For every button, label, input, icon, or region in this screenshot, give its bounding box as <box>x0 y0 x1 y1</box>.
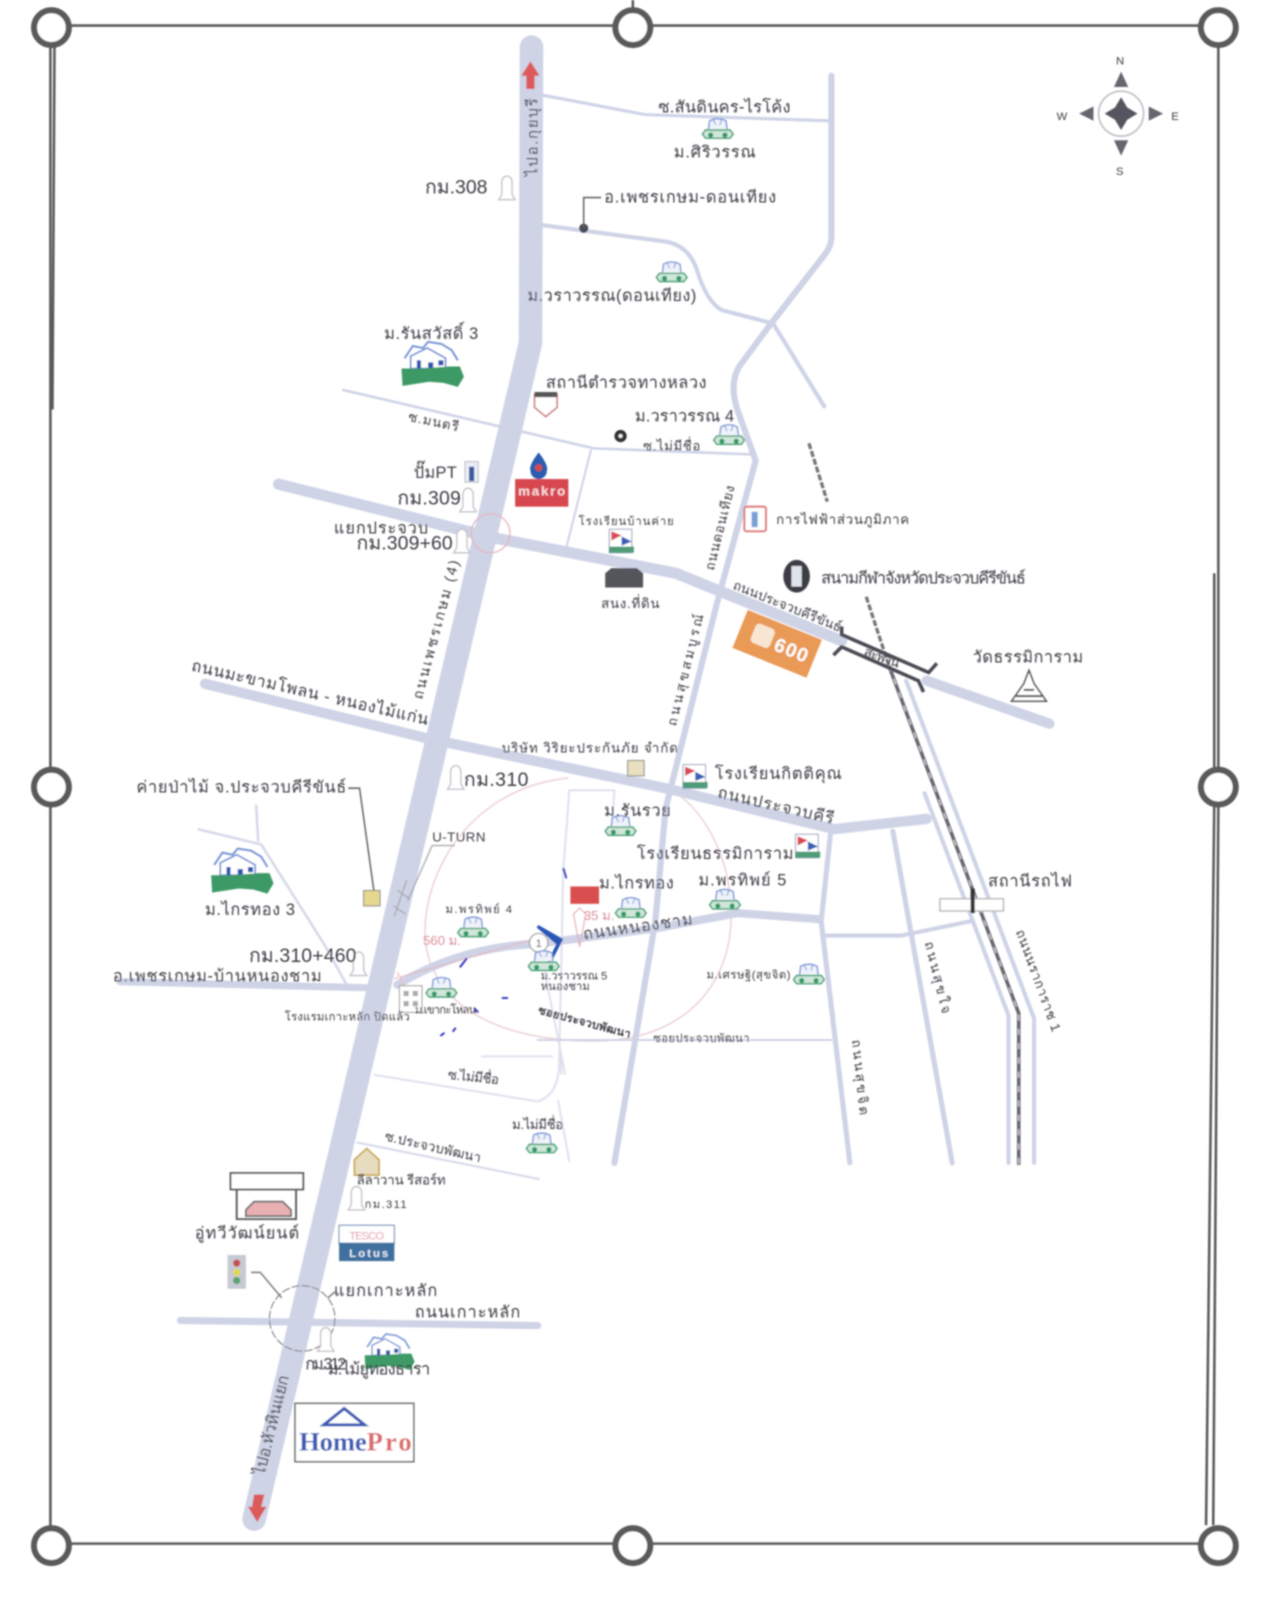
compass: W <box>1057 111 1068 123</box>
place labels: ถนนหนองชาม <box>582 910 694 944</box>
place labels: โรงเรียนบ้านค่าย <box>579 514 674 528</box>
Tesco Lotus logo <box>339 1225 394 1261</box>
place labels: กม.309 <box>397 488 461 510</box>
place labels: โรงแรมเกาะหลัก ปิดแล้ว <box>285 1010 410 1024</box>
place labels: ม.วราวรรณ 5 <box>541 971 607 983</box>
traffic light <box>227 1255 246 1289</box>
place labels: วัดธรรมิการาม <box>973 648 1083 666</box>
place labels: ถนนประจวบคีรีขันธ์ <box>731 577 844 635</box>
place labels: ไปอ.หัวหินแยก <box>249 1373 293 1479</box>
orange shop logo: 600 <box>771 634 811 667</box>
makro logo: makro <box>518 483 565 498</box>
place labels: บริษัท วิริยะประกันภัย จำกัด <box>502 740 678 755</box>
place labels: สนามกีฬาจังหวัดประจวบคีรีขันธ์ <box>821 568 1026 587</box>
road network <box>120 47 1049 1519</box>
place labels: ซ.ไม่มีชื่อ <box>643 436 700 453</box>
HomePro logo: Pro <box>367 1426 412 1456</box>
place labels: กม.311 <box>365 1199 407 1211</box>
red locator rectangle and distance marks: 1 <box>536 938 542 950</box>
place labels: อู่ทวีวัฒน์ยนต์ <box>195 1224 299 1244</box>
place labels: ถนนมะขามโพลน - หนองไม้แก่น <box>190 656 430 729</box>
compass: S <box>1116 166 1123 178</box>
place labels: ซอยประจวบพัฒนา <box>537 1004 632 1041</box>
place labels: ปั๊มPT <box>414 460 457 482</box>
place labels: กม.309+60 <box>356 533 453 555</box>
orange shop logo <box>732 610 822 678</box>
place labels: ลีลาวาน รีสอร์ท <box>357 1172 446 1187</box>
garage icon <box>231 1173 303 1219</box>
place labels: U-TURN <box>432 829 485 844</box>
kilometre markers <box>318 176 515 1351</box>
place labels: กม.310+460 <box>249 945 357 967</box>
place labels: ไปอ.กุยบุรี <box>524 98 543 178</box>
place labels: สถานีตำรวจทางหลวง <box>546 374 707 392</box>
red locator rectangle and distance marks <box>251 198 627 1351</box>
place labels: ม.พรทิพย์ 5 <box>698 870 786 889</box>
railway bridge <box>833 626 937 692</box>
place labels: อ.เพชรเกษม-บ้านหนองชาม <box>113 968 322 986</box>
place labels: โรงเรียนธรรมิการาม <box>637 844 794 863</box>
place labels: อ.เพชรเกษม-ดอนเทียง <box>604 189 776 207</box>
place labels: ม.รันรวย <box>604 802 671 820</box>
place labels: ม.รันสวัสดิ์ 3 <box>384 321 478 343</box>
direction arrows <box>248 61 540 1522</box>
place labels: สะพาน <box>862 644 902 671</box>
place labels: ม.ไม่มีชื่อ <box>512 1115 563 1132</box>
place labels: ซ.ประจวบพัฒนา <box>383 1129 483 1165</box>
place labels <box>113 98 1083 1479</box>
Tesco Lotus logo: Lotus <box>349 1248 388 1260</box>
place labels: กม.308 <box>425 176 487 198</box>
main highway <box>254 47 531 1519</box>
place labels: ถนนนราการาช 1 <box>1013 927 1064 1034</box>
Tesco Lotus logo: TESCO <box>349 1231 384 1243</box>
distance ring <box>425 778 731 1041</box>
place labels: ถนนประจวบคีรี <box>716 784 836 828</box>
railway <box>809 443 1019 1165</box>
makro logo <box>515 479 568 507</box>
place labels: การไฟฟ้าส่วนภูมิภาค <box>776 512 909 528</box>
place labels: ม.วราวรรณ(ดอนเทียง) <box>527 287 696 305</box>
place labels: ม.ไกรทอง 3 <box>205 900 295 919</box>
place labels: ม.ศิริวรรณ <box>674 144 756 162</box>
place labels: กม.310 <box>464 769 529 791</box>
place labels: แยกประจวบ <box>334 519 428 537</box>
place labels: ซอยประจวบพัฒนา <box>653 1033 750 1045</box>
place labels: ม.วราวรรณ 4 <box>635 408 734 426</box>
place labels: ถนนดอนเทียง <box>702 484 738 572</box>
place labels: ม.เศรษฐิ(สุขจิต) <box>707 970 791 982</box>
place labels: ถนนสุขใจ <box>921 940 954 1015</box>
place labels: ถนนสุขจิต <box>848 1039 872 1116</box>
HomePro logo: Home <box>299 1426 367 1456</box>
place labels: ม.เขากะโหลน <box>415 1002 477 1016</box>
place labels: สถานีรถไฟ <box>988 871 1072 890</box>
place labels: ม.พรทิพย์ 4 <box>446 903 512 916</box>
place labels: ม.ไม้ยูทองธารา <box>328 1360 430 1380</box>
compass <box>1057 55 1179 178</box>
housing icons <box>211 119 824 1370</box>
place labels: 35 ม. <box>584 908 614 923</box>
place labels: ซ.มนตรี <box>407 409 460 434</box>
place labels: สนง.ที่ดิน <box>601 594 659 611</box>
school icons <box>609 529 820 858</box>
compass: N <box>1116 55 1124 67</box>
place labels: โรงเรียนกิตติคุณ <box>715 764 842 784</box>
place labels: ค่ายป่าไม้ จ.ประจวบคีรีขันธ์ <box>136 777 346 796</box>
HomePro logo <box>295 1403 414 1462</box>
place labels: ถนนเพชรเกษม (4) <box>410 559 463 701</box>
place labels: หนองชาม <box>541 981 590 993</box>
place labels: ม.ไกรทอง <box>599 873 674 892</box>
small landmark icons <box>354 392 1046 1175</box>
place labels: กม.312 <box>305 1356 346 1374</box>
place labels: 560 ม. <box>423 933 461 948</box>
place labels: ซ.ไม่มีชื่อ <box>447 1065 500 1087</box>
place labels: ถนนสุขสมบูรณ์ <box>664 613 707 728</box>
place labels: ซ.สันดินคร-ไรโค้ง <box>658 98 790 117</box>
place labels: ถนนเกาะหลัก <box>415 1303 520 1321</box>
place labels: แยกเกาะหลัก <box>334 1282 437 1300</box>
compass: E <box>1171 111 1179 123</box>
